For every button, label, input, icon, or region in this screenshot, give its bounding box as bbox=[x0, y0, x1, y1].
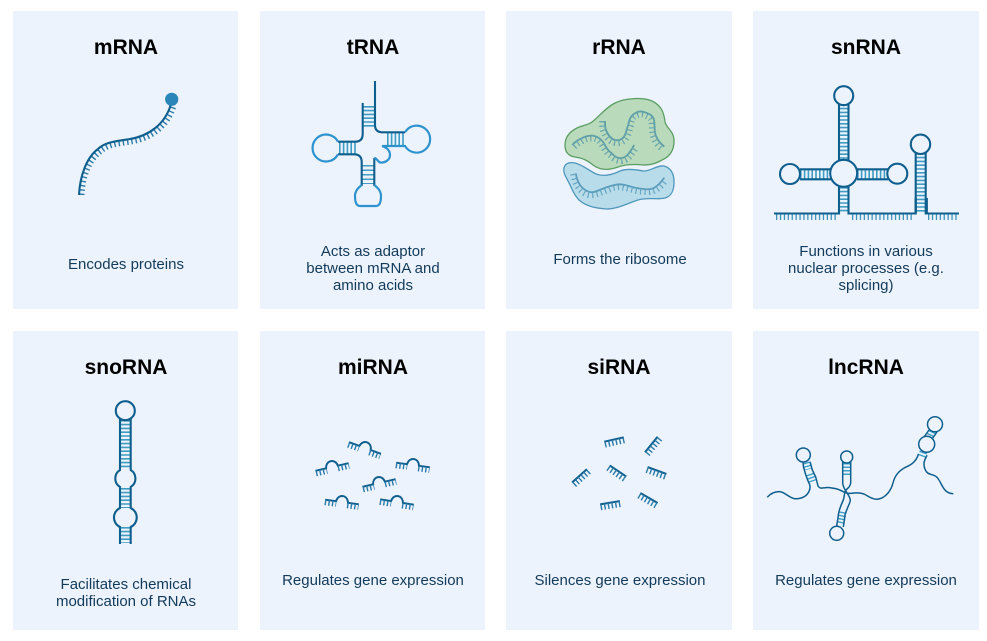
icon: mRNA strand bbox=[79, 93, 178, 195]
icon: snoRNA hairpin bbox=[114, 401, 137, 544]
description: lncRNA: Regulates gene expression bbox=[775, 572, 957, 589]
panel: miRNA bbox=[260, 331, 485, 630]
icon: snRNA structure bbox=[774, 86, 959, 217]
description: mRNA: Encodes proteins bbox=[68, 256, 184, 273]
panel: rRNA bbox=[506, 11, 732, 309]
panel: mRNA bbox=[13, 11, 238, 309]
description: tRNA: Acts as adaptor bbox=[321, 243, 425, 260]
panel: tRNA bbox=[260, 11, 485, 309]
description: rRNA: Forms the ribosome bbox=[553, 251, 687, 268]
heading: rRNA: rRNA bbox=[592, 36, 646, 59]
heading: siRNA: siRNA bbox=[587, 356, 651, 379]
heading: snoRNA: snoRNA bbox=[85, 356, 167, 379]
heading: snRNA: snRNA bbox=[831, 36, 901, 59]
description: miRNA: Regulates gene expression bbox=[282, 572, 464, 589]
description: siRNA: Silences gene expression bbox=[535, 572, 705, 589]
icon: ribosome subunits bbox=[564, 99, 674, 209]
description: snoRNA: Facilitates chemical bbox=[61, 576, 191, 593]
heading: mRNA: mRNA bbox=[94, 36, 158, 59]
icon: lncRNA structure bbox=[767, 417, 953, 540]
panel: siRNA bbox=[506, 331, 732, 630]
panel: tRNA: amino acids bbox=[333, 277, 413, 294]
heading: tRNA: tRNA bbox=[347, 36, 399, 59]
icon: miRNA fragments bbox=[314, 437, 431, 507]
panel: snRNA: nuclear processes (e.g. bbox=[788, 260, 944, 277]
icon: tRNA cloverleaf bbox=[313, 81, 430, 206]
panel: snoRNA: modification of RNAs bbox=[56, 593, 196, 610]
description: snRNA: Functions in various bbox=[799, 243, 933, 260]
heading: lncRNA: lncRNA bbox=[828, 356, 904, 379]
icon: siRNA fragments bbox=[572, 437, 666, 507]
heading: miRNA: miRNA bbox=[338, 356, 408, 379]
panel: snRNA: splicing) bbox=[838, 277, 894, 294]
panel: tRNA: between mRNA and bbox=[306, 260, 440, 277]
panel: snoRNA bbox=[13, 331, 238, 630]
panel: snRNA bbox=[753, 11, 979, 309]
panel: lncRNA bbox=[753, 331, 979, 630]
